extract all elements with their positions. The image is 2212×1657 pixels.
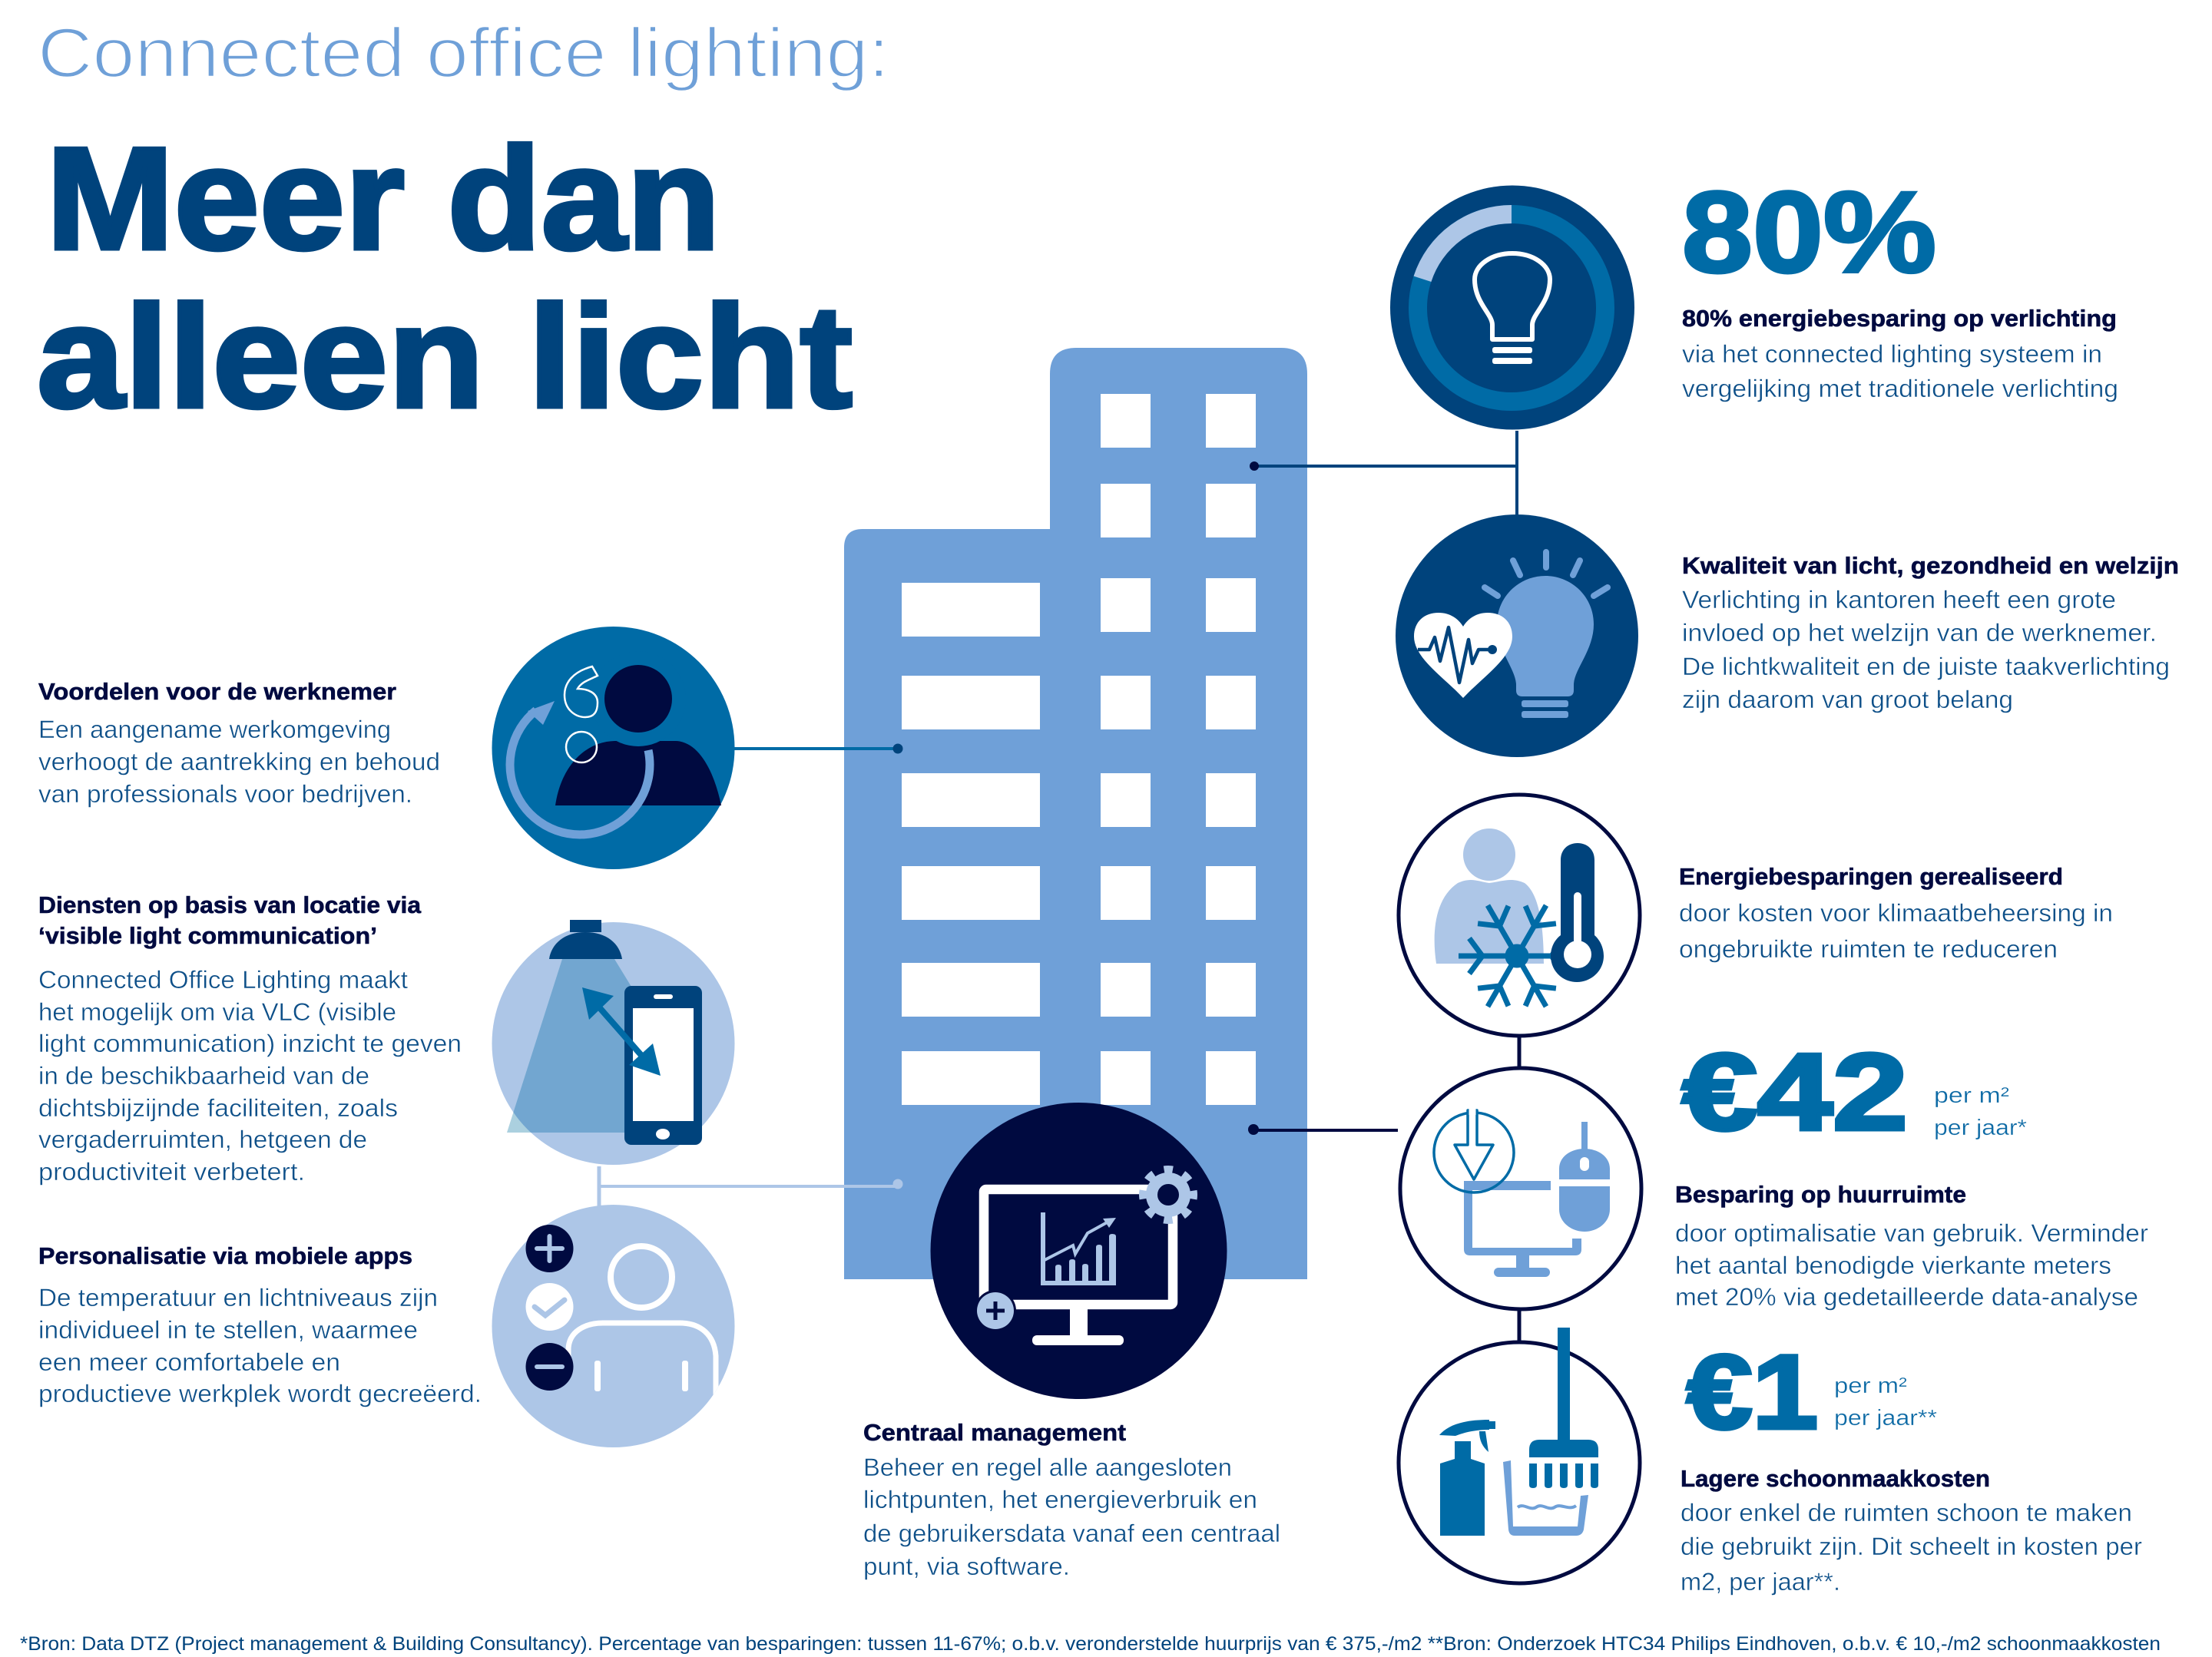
big number 80%: 80% bbox=[1682, 167, 1936, 296]
text block: door kosten voor klimaatbeheersing in bbox=[1679, 899, 2113, 927]
text block: punt, via software. bbox=[863, 1553, 1070, 1580]
text block: light communication) inzicht te geven bbox=[38, 1030, 462, 1057]
text block: vergaderruimten, hetgeen de bbox=[38, 1126, 367, 1153]
text block bbox=[863, 1419, 1280, 1580]
text block bbox=[38, 1242, 482, 1407]
text block: Lagere schoonmaakkosten bbox=[1681, 1465, 1990, 1492]
text block: Voordelen voor de werknemer bbox=[38, 678, 396, 705]
icon: download, monitor, mouse bbox=[1400, 1068, 1641, 1309]
subtitle: Connected office lighting: bbox=[38, 15, 889, 92]
connector: right lower circles to building bbox=[1248, 1037, 1519, 1342]
unit label: per jaar** bbox=[1834, 1406, 1937, 1430]
text block: Energiebesparingen gerealiseerd bbox=[1679, 863, 2063, 890]
text block: Personalisatie via mobiele apps bbox=[38, 1242, 412, 1269]
unit label: per m² bbox=[1834, 1374, 1907, 1398]
text block: De lichtkwaliteit en de juiste taakverlichting bbox=[1682, 653, 2170, 680]
icon: bulb and heart bbox=[1396, 514, 1638, 757]
text block: individueel in te stellen, waarmee bbox=[38, 1316, 418, 1344]
panel: rental space saving bbox=[1400, 1031, 2148, 1311]
text block: Connected Office Lighting maakt bbox=[38, 966, 408, 994]
panel: 80% energy saving bbox=[1390, 167, 2118, 430]
text block bbox=[38, 678, 440, 808]
icon: spray bottle, mop, bucket bbox=[1399, 1328, 1640, 1583]
text block: door optimalisatie van gebruik. Verminder bbox=[1675, 1219, 2148, 1247]
unit label bbox=[1934, 1083, 2027, 1140]
panel: central management bbox=[863, 1103, 1280, 1580]
text block: Beheer en regel alle aangesloten bbox=[863, 1454, 1232, 1481]
title bbox=[37, 117, 853, 438]
text block bbox=[1682, 305, 2118, 402]
text block: vergelijking met traditionele verlichting bbox=[1682, 375, 2118, 402]
text block: zijn daarom van groot belang bbox=[1682, 686, 2013, 713]
unit label bbox=[1834, 1374, 1937, 1430]
title: Meer dan bbox=[46, 117, 720, 280]
panel: cleaning costs bbox=[1399, 1328, 2142, 1596]
title: alleen licht bbox=[37, 276, 853, 438]
text block: productiviteit verbetert. bbox=[38, 1158, 305, 1186]
panel: climate energy saving bbox=[1399, 795, 2113, 1036]
icon: person, snowflake, thermometer bbox=[1399, 795, 1640, 1036]
text block: het mogelijk om via VLC (visible bbox=[38, 998, 396, 1026]
icon: monitor with chart and gear bbox=[931, 1103, 1227, 1399]
text block: Besparing op huurruimte bbox=[1675, 1181, 1966, 1208]
text block: met 20% via gedetailleerde data-analyse bbox=[1675, 1283, 2138, 1311]
text block: een meer comfortabele en bbox=[38, 1348, 340, 1376]
panel: employee benefits bbox=[38, 627, 734, 869]
unit label: per m² bbox=[1934, 1083, 2009, 1108]
footnote: *Bron: Data DTZ (Project management & Building Consultancy). Percentage van besparingen: tussen 11-67%; o.b.v. veronderstelde huurprijs van € 375,-/m2 **Bron: Onderzoek HTC34 Philips Eindhoven, o.b.v. € 10,-/m2 schoonmaakkosten bbox=[20, 1633, 2161, 1655]
icon: bulb with progress ring bbox=[1390, 186, 1634, 430]
connector: location and apps to building bbox=[599, 1166, 903, 1208]
text block: Een aangename werkomgeving bbox=[38, 716, 391, 743]
panel: personalisation via apps bbox=[38, 1205, 734, 1447]
text block bbox=[1675, 1181, 2148, 1311]
text block: lichtpunten, het energieverbruik en bbox=[863, 1486, 1257, 1513]
panel: light quality and health bbox=[1396, 514, 2179, 757]
text block: Kwaliteit van licht, gezondheid en welzijn bbox=[1682, 552, 2179, 579]
text block: in de beschikbaarheid van de bbox=[38, 1062, 369, 1090]
building bbox=[844, 348, 1307, 1279]
icon: person with plus, check, minus bbox=[492, 1205, 734, 1447]
big number €1: €1 bbox=[1687, 1334, 1818, 1451]
text block: van professionals voor bedrijven. bbox=[38, 780, 412, 808]
text block: 80% energiebesparing op verlichting bbox=[1682, 305, 2117, 332]
text block: via het connected lighting systeem in bbox=[1682, 340, 2102, 368]
text block: door enkel de ruimten schoon te maken bbox=[1681, 1499, 2132, 1526]
text block: dichtsbijzijnde faciliteiten, zoals bbox=[38, 1094, 398, 1122]
text block: Diensten op basis van locatie via bbox=[38, 891, 422, 918]
text block bbox=[1682, 552, 2179, 713]
text block: productieve werkplek wordt gecreëerd. bbox=[38, 1380, 482, 1407]
panel: visible light communication bbox=[38, 891, 734, 1186]
text block: Centraal management bbox=[863, 1419, 1126, 1446]
connector: right top circles to building bbox=[1250, 431, 1517, 516]
text block: m2, per jaar**. bbox=[1681, 1568, 1840, 1596]
icon: employee retention bbox=[492, 627, 734, 869]
text block: Verlichting in kantoren heeft een grote bbox=[1682, 586, 2116, 614]
text block: invloed op het welzijn van de werknemer. bbox=[1682, 619, 2157, 647]
text block: de gebruikersdata vanaf een centraal bbox=[863, 1520, 1280, 1547]
connector: employee benefits to building bbox=[734, 743, 903, 754]
text block bbox=[38, 891, 462, 1186]
icon: lamp and smartphone bbox=[492, 920, 734, 1165]
text block bbox=[1679, 863, 2113, 963]
text block: die gebruikt zijn. Dit scheelt in kosten per bbox=[1681, 1533, 2142, 1560]
text block: ‘visible light communication’ bbox=[38, 922, 377, 949]
big number €42: €42 bbox=[1682, 1031, 1908, 1153]
text block: ongebruikte ruimten te reduceren bbox=[1679, 935, 2058, 963]
unit label: per jaar* bbox=[1934, 1116, 2027, 1140]
text block bbox=[1681, 1465, 2142, 1596]
text block: De temperatuur en lichtniveaus zijn bbox=[38, 1284, 438, 1311]
text block: het aantal benodigde vierkante meters bbox=[1675, 1252, 2111, 1279]
text block: verhoogt de aantrekking en behoud bbox=[38, 748, 440, 776]
